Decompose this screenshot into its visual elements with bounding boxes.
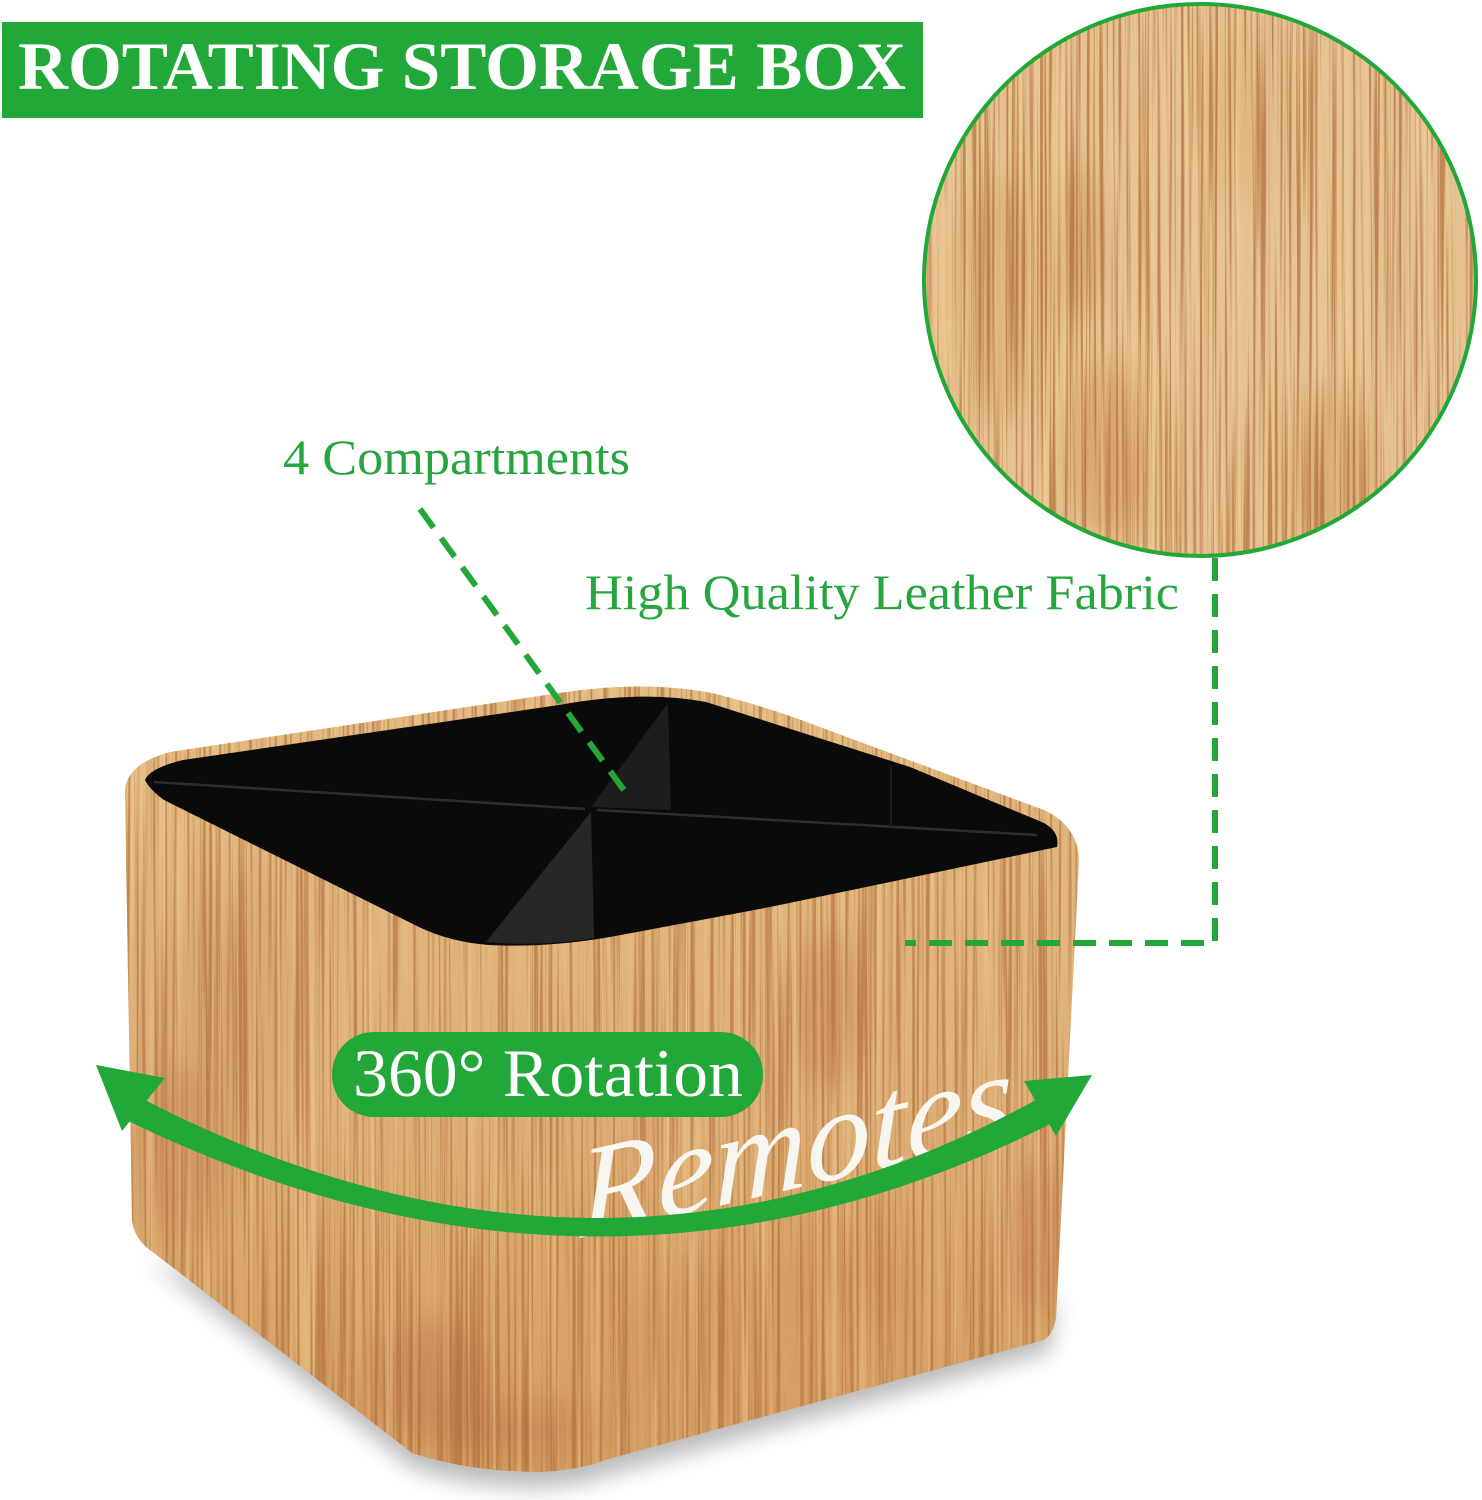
storage box [120, 680, 1085, 1500]
title banner: ROTATING STORAGE BOX [18, 28, 906, 104]
box wood body [120, 680, 1085, 1500]
printed word on box: Remotes [577, 1022, 1014, 1267]
rotation arrow [96, 1065, 1092, 1236]
box interior [145, 697, 1057, 946]
box ground shadow [150, 1260, 1056, 1488]
label: material: High Quality Leather Fabric [585, 564, 1179, 620]
front divider wall [486, 812, 594, 944]
divider seams [154, 782, 1037, 835]
dashed leader: material [905, 558, 1215, 943]
rotation badge: 360° Rotation [353, 1035, 743, 1111]
dashed leader: compartments [420, 509, 626, 793]
back divider wall [591, 703, 671, 810]
label: 4 compartments: 4 Compartments [283, 429, 630, 485]
material close-up circle [920, 0, 1482, 560]
